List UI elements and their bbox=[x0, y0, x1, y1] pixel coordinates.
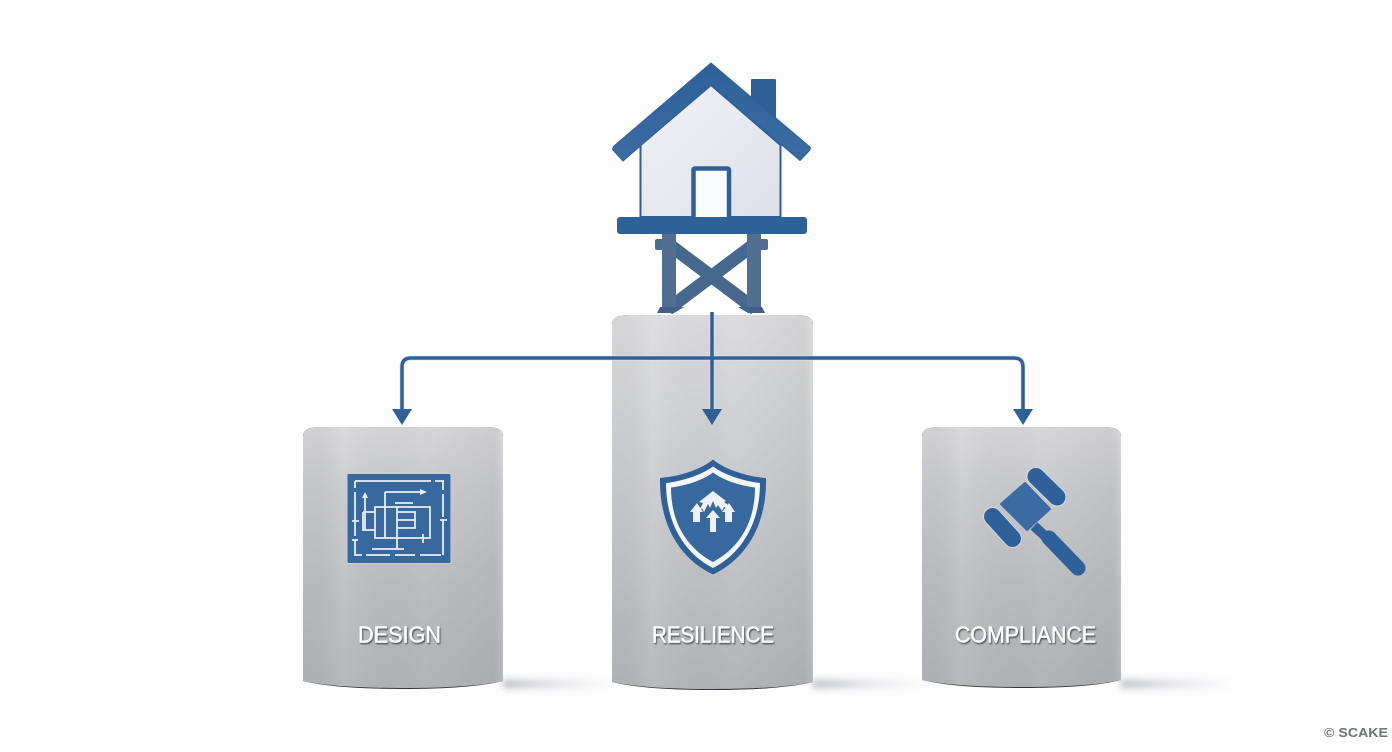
watermark: © SCAKE bbox=[1324, 725, 1388, 740]
panel: resilience pillar bbox=[612, 315, 925, 690]
arrow markers in blueprint bbox=[362, 489, 427, 498]
arrows: connector from house to three pillars bbox=[392, 312, 1033, 425]
arrowhead: resilience bbox=[702, 409, 722, 425]
house platform bbox=[617, 217, 807, 234]
house wall bbox=[640, 85, 780, 217]
house stilts bbox=[655, 233, 768, 313]
icon: blueprint bbox=[347, 474, 451, 564]
house door bbox=[694, 168, 729, 218]
label: design: DESIGN bbox=[358, 622, 441, 648]
panel: compliance pillar bbox=[922, 427, 1233, 688]
icon: elevated house bbox=[613, 63, 810, 313]
label: compliance: COMPLIANCE bbox=[955, 622, 1096, 648]
arrowhead: compliance bbox=[1013, 409, 1033, 425]
icon: shield with upward arrows bbox=[660, 460, 766, 574]
arrowhead: design bbox=[392, 409, 412, 425]
label: resilience: RESILIENCE bbox=[652, 622, 774, 648]
icon: gavel bbox=[992, 476, 1078, 568]
panel: design pillar bbox=[303, 427, 615, 689]
house roof bbox=[613, 63, 810, 161]
house chimney bbox=[751, 79, 776, 122]
